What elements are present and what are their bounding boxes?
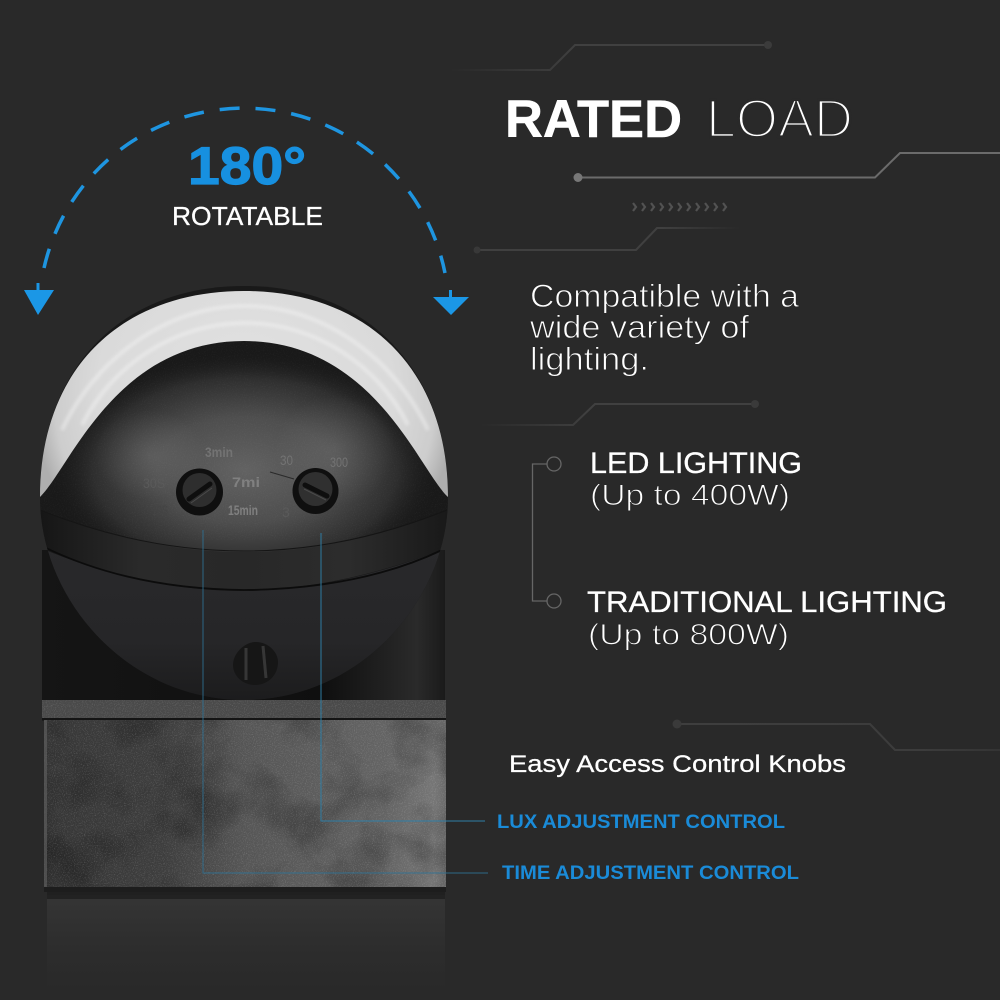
dial labels: 3 <box>282 504 290 520</box>
circuit line: under heading <box>574 153 1000 182</box>
right arrow <box>433 290 469 315</box>
leader line: time control <box>203 530 488 873</box>
circuit line: top <box>450 41 772 70</box>
heading: rated load: RATED <box>505 90 682 149</box>
dial labels: 10S <box>152 502 168 518</box>
reflection <box>47 891 445 1000</box>
label: lux adjustment: LUX ADJUSTMENT CONTROL <box>497 812 785 833</box>
knob: time <box>176 468 223 516</box>
dial labels: 3min <box>205 444 233 460</box>
left arrow <box>24 283 54 315</box>
circuit line: above description <box>474 228 740 254</box>
lighting item: led: LED LIGHTING <box>590 447 802 480</box>
bracket connector <box>532 457 561 608</box>
rotation arc <box>24 108 445 315</box>
lighting item: traditional: TRADITIONAL LIGHTING <box>587 586 947 619</box>
circuit line: above lighting list <box>480 400 759 425</box>
knob: lux <box>270 468 338 514</box>
dome highlight <box>76 368 414 552</box>
top band of base <box>42 700 446 720</box>
description text: Compatible with a <box>530 278 799 314</box>
lighting item: traditional: (Up to 800W) <box>588 618 789 652</box>
leader line: lux control <box>321 533 485 821</box>
chevron row <box>633 203 726 211</box>
lighting item: led: (Up to 400W) <box>590 479 790 512</box>
circuit line: above control knobs <box>672 720 1000 750</box>
dial labels: 30 <box>280 452 293 468</box>
dial labels: 15min <box>228 502 258 518</box>
sphere body <box>36 280 452 705</box>
label: rotatable: ROTATABLE <box>172 201 323 231</box>
subheading: easy access: Easy Access Control Knobs <box>509 751 846 778</box>
back plate <box>42 550 445 705</box>
product: sensor <box>40 286 448 920</box>
cable hole <box>233 642 278 685</box>
dial labels: 7mi <box>232 474 260 490</box>
middle band <box>42 512 405 589</box>
lower bowl <box>48 551 440 682</box>
dial labels: 30S <box>143 475 165 491</box>
description text: lighting. <box>530 341 649 377</box>
label: 180 degrees: 180° <box>188 137 306 196</box>
dial labels: 300 <box>330 454 348 470</box>
lighting item: led <box>590 447 802 512</box>
description text <box>529 278 799 377</box>
heading: rated load: LOAD <box>706 89 853 149</box>
dial labels <box>143 444 348 520</box>
label: time adjustment: TIME ADJUSTMENT CONTROL <box>502 863 799 884</box>
front box <box>44 720 446 892</box>
seam <box>44 547 442 590</box>
lens crescent <box>40 291 448 497</box>
heading: rated load <box>505 89 853 149</box>
lighting item: traditional <box>587 586 947 652</box>
description text: wide variety of <box>529 309 749 345</box>
